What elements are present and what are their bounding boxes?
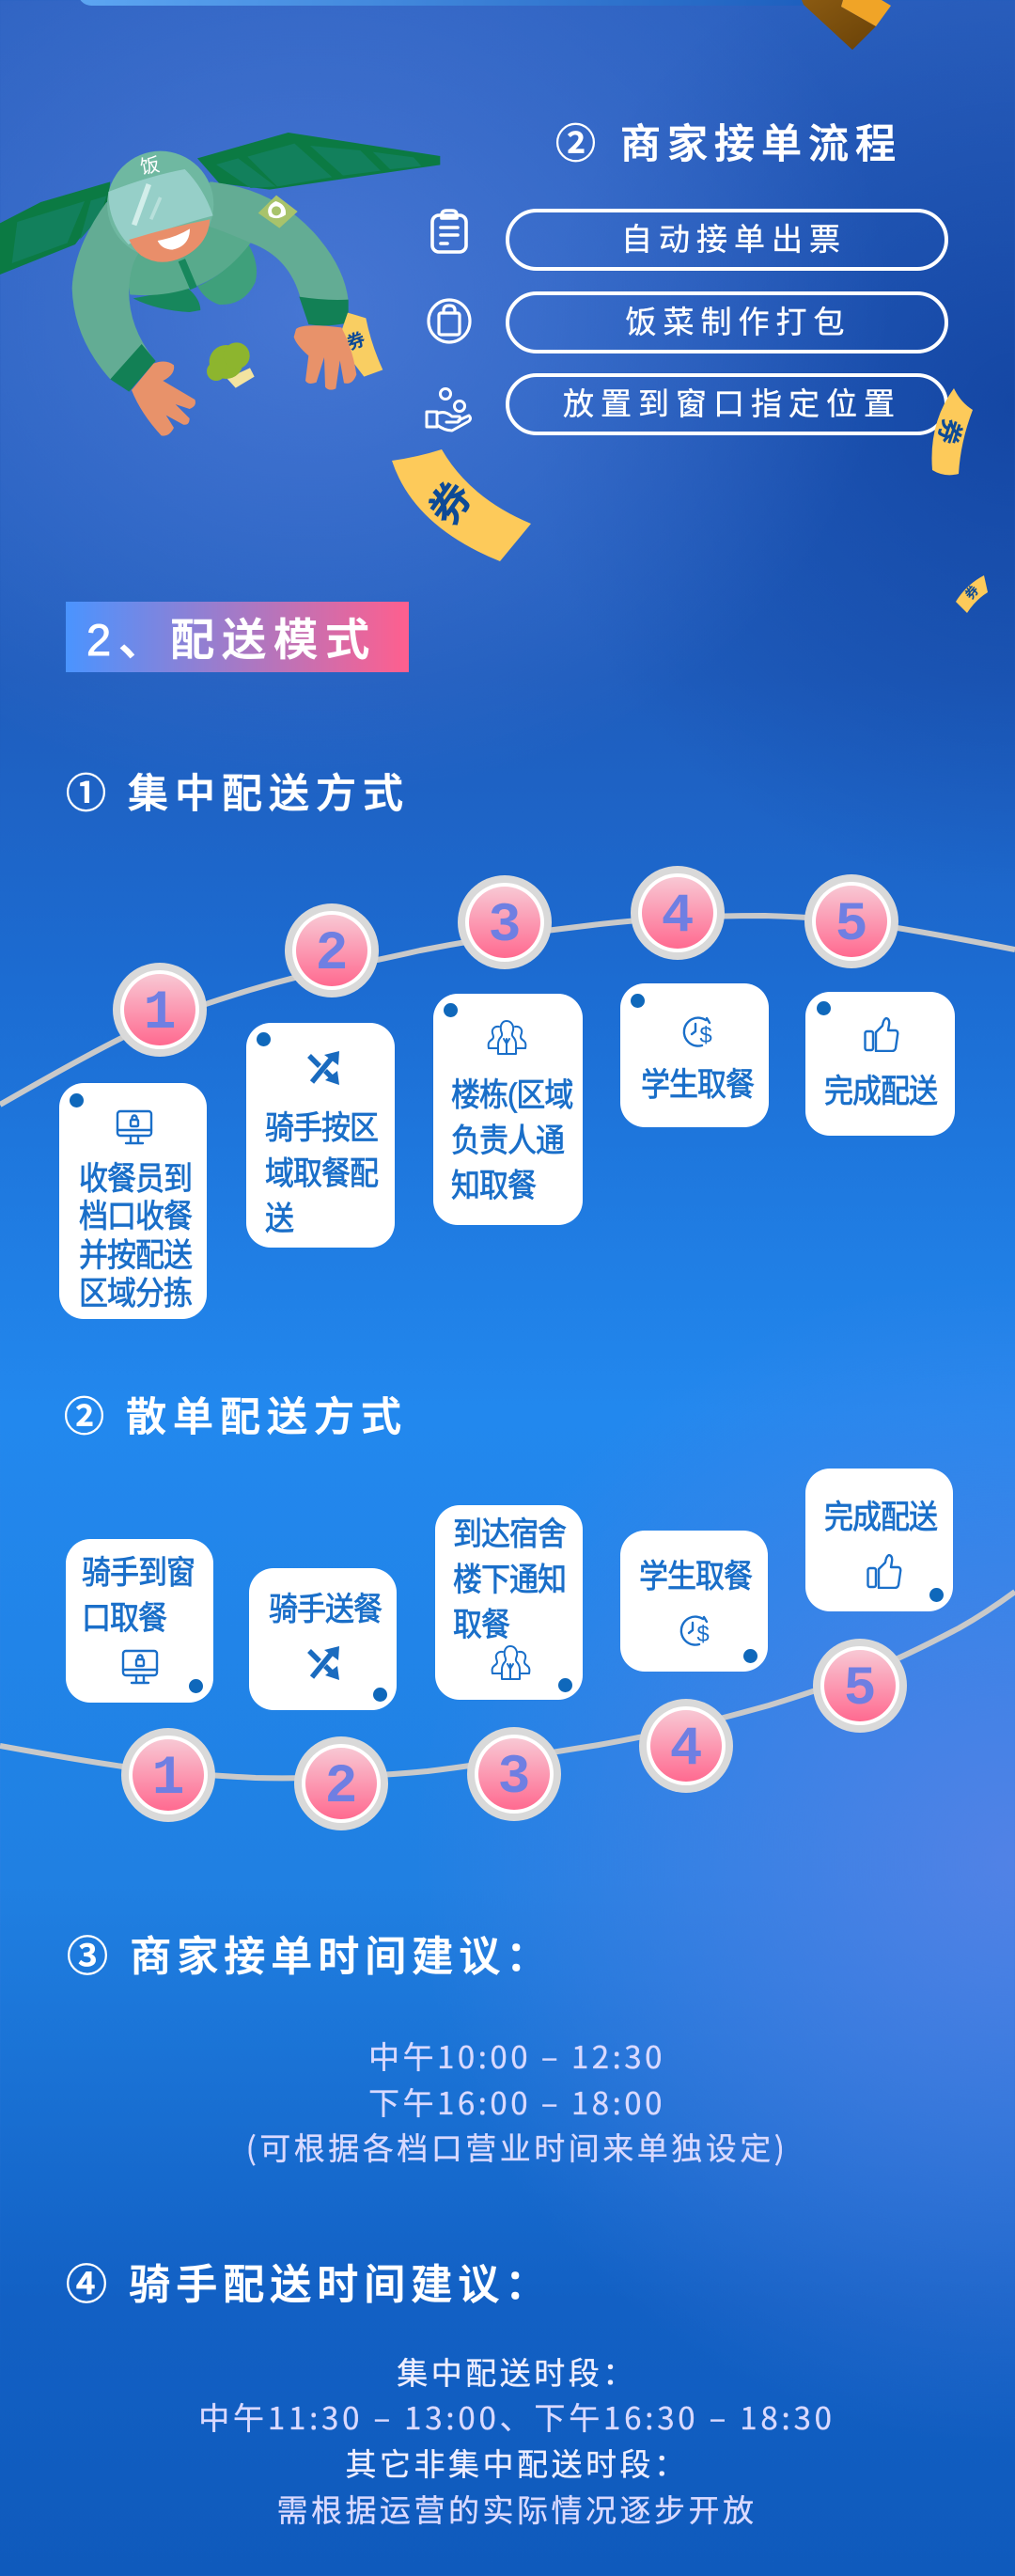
- card: rider delivers: [249, 1568, 397, 1710]
- step 2: 2: [325, 1757, 357, 1818]
- heading: merchant order flow: ② 商家接单流程: [555, 122, 902, 167]
- step 4: [639, 1699, 733, 1793]
- right wing: [197, 133, 440, 190]
- right leg: [197, 243, 257, 305]
- card: student pickup: 学生取餐: [639, 1558, 752, 1595]
- illustration: flying delivery rider: [0, 133, 440, 436]
- card: collector sorting: 区域分拣: [79, 1275, 192, 1312]
- step 5: 5: [844, 1659, 876, 1720]
- pill: cook and pack: [506, 291, 948, 353]
- icon: falling box: [802, 0, 891, 50]
- step 3: [458, 875, 552, 969]
- card: student pickup: $: [699, 1023, 712, 1048]
- card: rider picks up by area: 送: [265, 1200, 293, 1237]
- text block: merchant hours: (可根据各档口营业时间来单独设定): [246, 2124, 788, 2169]
- card: rider to window: [66, 1539, 213, 1703]
- card: delivery complete: 完成配送: [824, 1073, 937, 1110]
- left foot: [133, 289, 200, 312]
- timeline: scattered delivery curve and number circles: [0, 1589, 1015, 1830]
- text block: rider hours: 其它非集中配送时段：: [346, 2440, 688, 2485]
- step 1: [113, 963, 207, 1057]
- card: delivery complete: [805, 992, 955, 1136]
- card: student pickup: [620, 983, 769, 1127]
- text block: merchant hours: [246, 2033, 788, 2169]
- torso: [106, 181, 251, 295]
- helmet: [107, 151, 213, 262]
- card: rider picks up by area: [246, 1023, 395, 1248]
- card: arrive at dorm: 取餐: [453, 1606, 509, 1643]
- card: building leader notifies: [433, 994, 583, 1225]
- coupon: small: [956, 575, 988, 613]
- left wing: [0, 181, 110, 275]
- step 3: 3: [489, 896, 521, 957]
- icon: shopping bag: [427, 298, 472, 344]
- card: delivery complete: [805, 1469, 953, 1611]
- shoulder patch: [258, 196, 298, 228]
- card: student pickup: $: [696, 1622, 710, 1647]
- broccoli: [207, 342, 255, 388]
- coupon: small: 券: [961, 582, 982, 603]
- text block: merchant hours: 中午10:00 – 12:30: [368, 2033, 665, 2078]
- pill: auto accept: 自动接单出票: [621, 222, 847, 257]
- section badge: delivery modes: 2、配送模式: [86, 615, 377, 665]
- heading: centralized delivery: ① 集中配送方式: [66, 772, 410, 817]
- coupon: large: 券: [421, 474, 482, 534]
- hands: [132, 325, 356, 436]
- step 1: [121, 1728, 215, 1822]
- section badge: delivery modes: [66, 602, 409, 672]
- card: rider to window: 口取餐: [82, 1599, 166, 1637]
- card: arrive at dorm: [435, 1505, 583, 1700]
- heading: scattered delivery: ② 散单配送方式: [64, 1395, 408, 1440]
- step 4: [631, 866, 725, 960]
- top strip: end of previous panel: [78, 0, 811, 6]
- heading: merchant hours: ③ 商家接单时间建议：: [67, 1934, 553, 1980]
- text block: rider hours: [198, 2348, 835, 2531]
- heading: rider hours: ④ 骑手配送时间建议：: [66, 2262, 552, 2308]
- right arm: [207, 181, 349, 301]
- text block: rider hours: 集中配送时段：: [397, 2348, 637, 2394]
- card: building leader notifies: 楼栋(区域: [451, 1076, 572, 1114]
- zipper: [181, 260, 194, 289]
- coupon: right: 券: [932, 415, 966, 448]
- card: rider picks up by area: 域取餐配: [265, 1154, 378, 1192]
- pill: place at window: 放置到窗口指定位置: [563, 386, 901, 421]
- cuffs: [110, 297, 349, 392]
- timeline: centralized delivery curve and number circles: [0, 866, 1015, 1107]
- icon: clipboard: [430, 209, 468, 254]
- step 2: [294, 1736, 388, 1830]
- step 2: 2: [316, 924, 348, 985]
- pill: auto accept: [506, 209, 948, 271]
- coupon: large: [392, 449, 531, 561]
- card: arrive at dorm: 楼下通知: [453, 1561, 566, 1598]
- card: rider picks up by area: 骑手按区: [265, 1109, 378, 1147]
- helmet: 饭: [138, 154, 162, 179]
- step 4: 4: [662, 887, 694, 948]
- card: collector sorting: [59, 1083, 207, 1319]
- card: rider delivers: 骑手送餐: [269, 1591, 382, 1628]
- card: student pickup: 学生取餐: [641, 1066, 754, 1104]
- ticket in hand: 券: [344, 328, 368, 354]
- step 3: [467, 1727, 561, 1821]
- text block: merchant hours: 下午16:00 – 18:00: [368, 2079, 665, 2124]
- pill: place at window: [506, 373, 948, 435]
- card: collector sorting: 收餐员到: [79, 1160, 192, 1197]
- step 1: 1: [144, 983, 176, 1045]
- card: building leader notifies: 负责人通: [451, 1122, 564, 1159]
- card: collector sorting: 档口收餐: [79, 1199, 192, 1235]
- card: collector sorting: 并按配送: [79, 1236, 192, 1273]
- card: rider to window: 骑手到窗: [82, 1554, 195, 1592]
- step 5: [813, 1639, 907, 1733]
- step 5: 5: [835, 895, 867, 956]
- card: delivery complete: 完成配送: [824, 1499, 937, 1536]
- step 5: [804, 874, 898, 968]
- coupon: right: [932, 388, 973, 476]
- card: arrive at dorm: 到达宿舍: [453, 1516, 566, 1553]
- step 2: [285, 903, 379, 997]
- step 1: 1: [152, 1749, 184, 1810]
- card: student pickup: [620, 1531, 768, 1672]
- pill: cook and pack: 饭菜制作打包: [626, 305, 851, 339]
- ticket in hand: [342, 313, 383, 377]
- step 4: 4: [670, 1720, 702, 1781]
- text block: rider hours: 需根据运营的实际情况逐步开放: [276, 2486, 757, 2531]
- text block: rider hours: 中午11:30 – 13:00、下午16:30 – 18:30: [198, 2394, 835, 2439]
- left arm: [72, 202, 155, 379]
- card: building leader notifies: 知取餐: [451, 1167, 536, 1204]
- step 3: 3: [498, 1748, 530, 1809]
- icon: hand with coins: [425, 387, 472, 432]
